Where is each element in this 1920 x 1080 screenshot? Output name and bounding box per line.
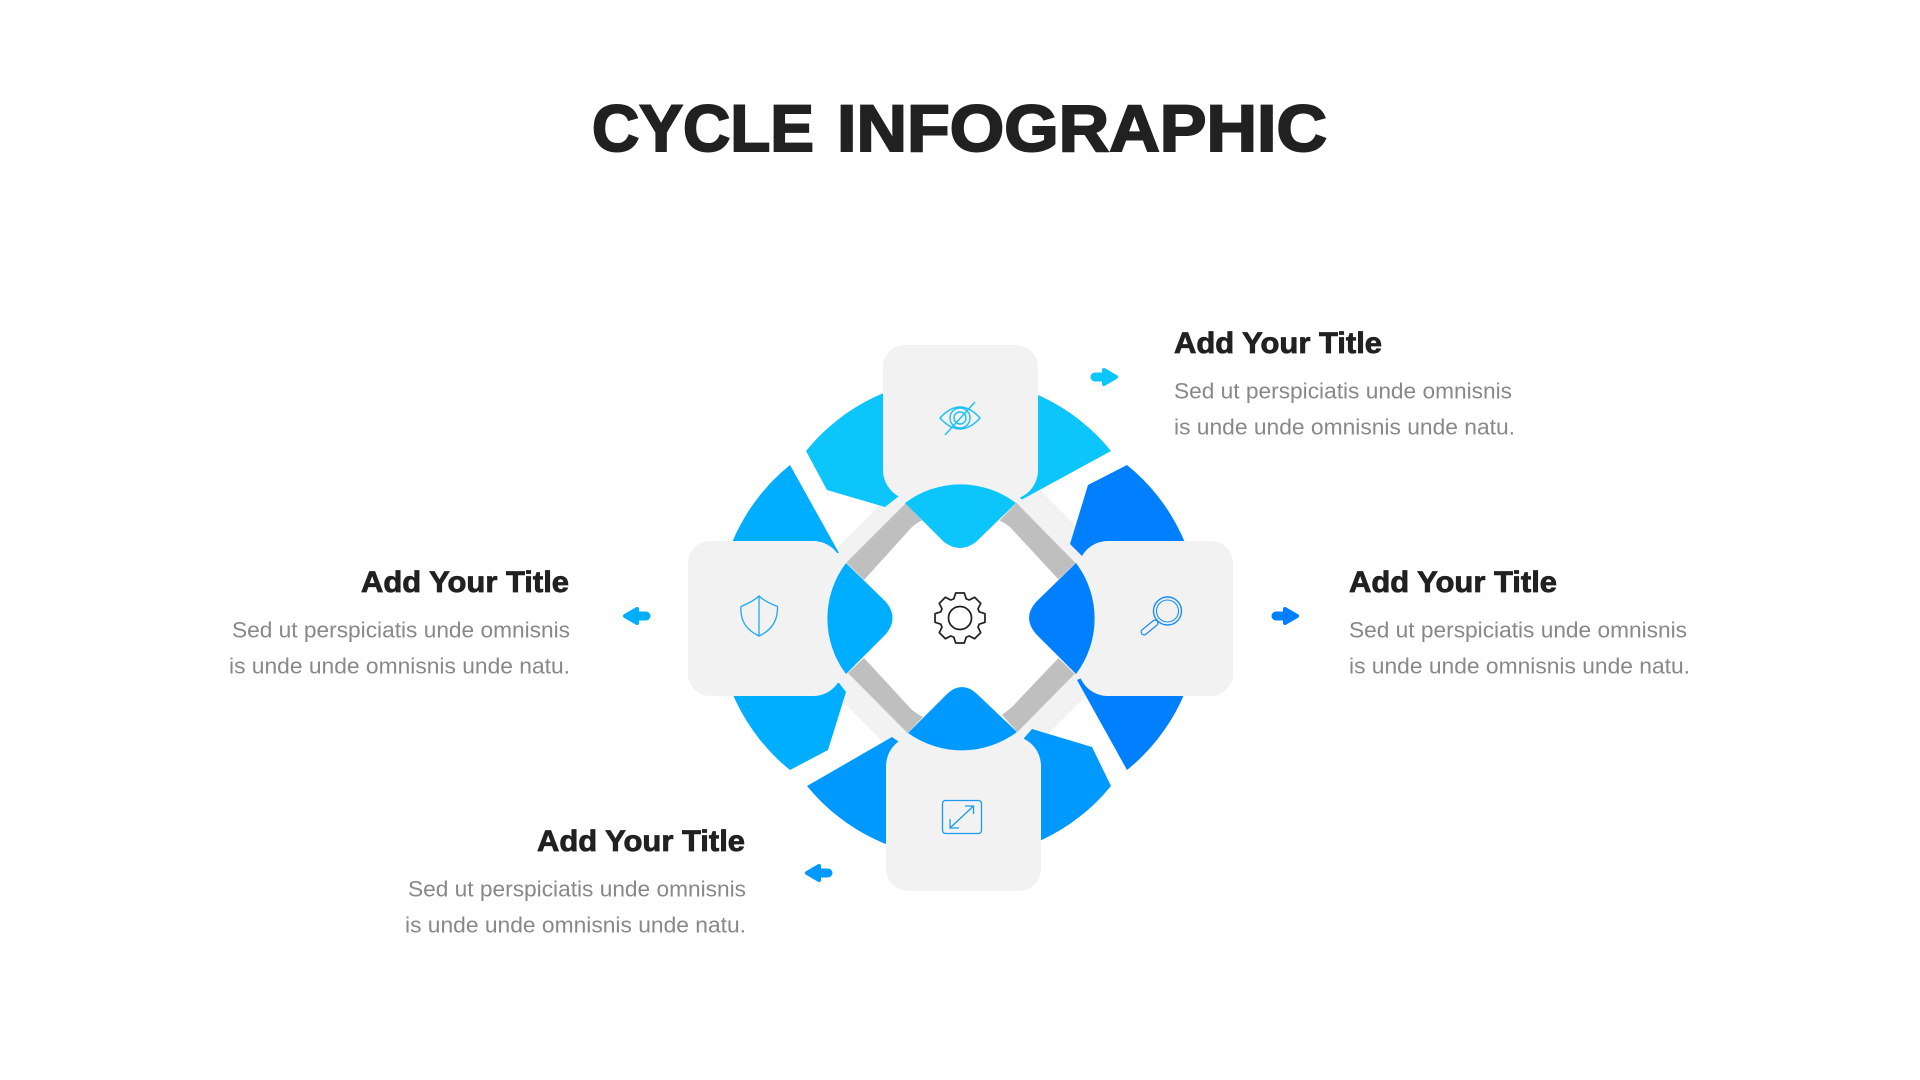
text block: left [229, 566, 570, 678]
text block: bottom left: is unde unde omnisnis unde natu. [405, 912, 746, 938]
arrow: bottom [807, 866, 828, 880]
text block: left: is unde unde omnisnis unde natu. [229, 654, 570, 678]
text block: right [1349, 566, 1690, 678]
title: INFOGRAPHIC [837, 91, 1327, 165]
text block: top right [1174, 327, 1515, 440]
white centre [848, 508, 1068, 728]
tile: right [1078, 541, 1233, 696]
text block: top right: Add Your Title [1174, 327, 1382, 360]
title: CYCLE [592, 91, 814, 165]
segment: bottom [807, 729, 1111, 858]
grey ring bands [846, 503, 1076, 733]
arrow: top [1095, 370, 1116, 384]
text block: bottom left: Add Your Title [537, 825, 745, 858]
text block: top right: Sed ut perspiciatis unde omnisnis [1174, 378, 1512, 404]
text block: right: Sed ut perspiciatis unde omnisnis [1349, 618, 1687, 642]
icon: magnifier [1144, 597, 1182, 632]
title [592, 91, 1327, 165]
segment: right [1070, 465, 1200, 770]
text block: left: Sed ut perspiciatis unde omnisnis [232, 618, 570, 642]
icon: crossed eye [940, 402, 980, 435]
petal: top [905, 484, 1016, 548]
icon: shield [741, 596, 778, 636]
petal: left [827, 563, 892, 674]
petal: right [1029, 563, 1095, 674]
segment: left [717, 465, 846, 770]
arrow: right [1276, 609, 1297, 623]
cycle diagram [688, 345, 1233, 891]
light diamond backing [763, 418, 1166, 820]
segment: top [806, 378, 1111, 507]
petal: bottom [908, 687, 1017, 750]
text block: right: is unde unde omnisnis unde natu. [1349, 654, 1690, 678]
text block: left: Add Your Title [361, 566, 569, 599]
tile: top [883, 345, 1038, 500]
tile: bottom [886, 736, 1041, 891]
text block: top right: is unde unde omnisnis unde natu. [1174, 414, 1515, 440]
arrow: left [625, 609, 646, 623]
icon: expand square [942, 800, 982, 834]
text block: bottom left [405, 825, 746, 938]
text block: right: Add Your Title [1349, 566, 1557, 599]
text block: bottom left: Sed ut perspiciatis unde omnisnis [408, 876, 746, 902]
icon: gear [935, 593, 985, 643]
tile: left [688, 541, 843, 696]
